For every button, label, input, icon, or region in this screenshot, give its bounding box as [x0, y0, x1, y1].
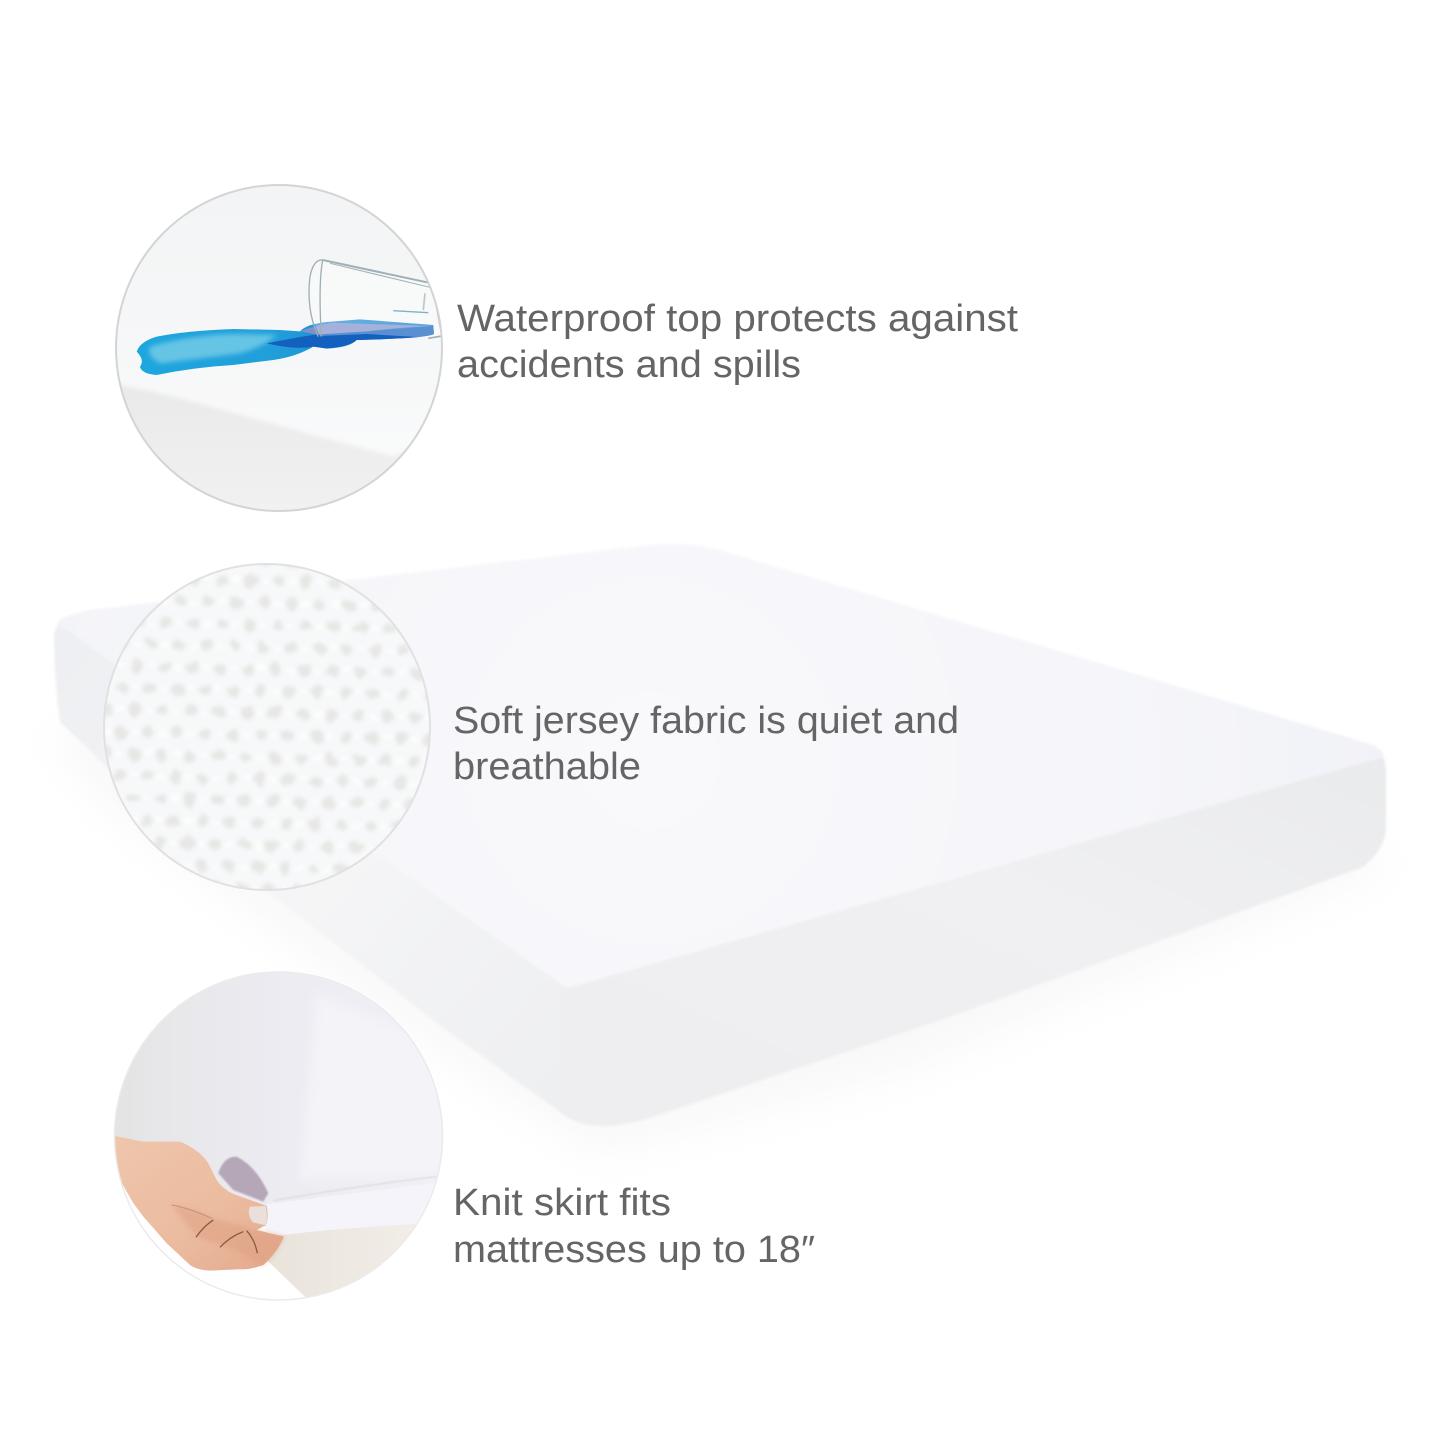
spill circle border	[116, 185, 442, 511]
text: waterproof: accidents and spills	[457, 344, 801, 386]
text: jersey: breathable	[453, 746, 641, 788]
photo circle: water spill on mattress	[117, 186, 441, 510]
thumb crease	[172, 1205, 212, 1218]
photo circle: jersey fabric weave	[98, 558, 438, 898]
fabric fold highlight	[300, 993, 447, 1180]
finger shadow through fabric	[218, 1157, 268, 1202]
thumbnail	[249, 1206, 267, 1225]
mattress core	[268, 1224, 416, 1297]
lighter spill surface	[149, 334, 277, 363]
text: jersey: Soft jersey fabric is quiet and	[453, 700, 959, 742]
mattress top surface	[58, 544, 1384, 988]
dark blue liquid in glass	[267, 326, 434, 348]
text: waterproof	[457, 298, 1018, 386]
fabric circle border	[104, 564, 430, 890]
text: waterproof: Waterproof top protects against	[457, 298, 1018, 340]
mattress front side face	[560, 752, 1386, 1126]
text: knit skirt	[453, 1182, 815, 1271]
mattress	[50, 544, 1386, 1155]
photo circle: hand lifting knit skirt	[110, 967, 450, 1308]
palm shadow under thumb	[172, 1205, 284, 1265]
skirt fold line	[273, 1177, 437, 1201]
knit circle border	[114, 972, 442, 1300]
knuckle creases	[196, 1220, 257, 1253]
hand	[110, 1135, 284, 1271]
mattress left side face	[54, 617, 617, 1126]
overturned glass	[309, 259, 442, 338]
fabric	[110, 967, 447, 1230]
knit skirt band	[265, 1201, 427, 1236]
text: knit skirt: Knit skirt fits	[453, 1182, 671, 1224]
mattress side in spill photo	[122, 386, 400, 510]
violet liquid reflection	[300, 323, 432, 335]
text: knit skirt: mattresses up to 18″	[453, 1229, 815, 1271]
blue spilled liquid	[137, 319, 434, 375]
text: jersey	[453, 700, 959, 788]
infographic canvas	[54, 184, 1386, 1301]
